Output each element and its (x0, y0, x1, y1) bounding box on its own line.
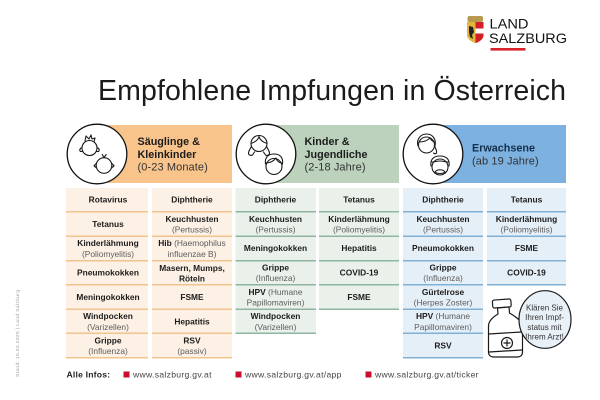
column 2: Masern, Mumps, (159, 263, 225, 273)
column 3: Papillomaviren) (247, 298, 305, 308)
column 5: Keuchhusten (416, 214, 470, 224)
column 5: Diphtherie (422, 194, 464, 204)
column 2: RSV (183, 336, 201, 346)
icon: two adults (403, 124, 463, 184)
footer: links (66, 370, 479, 380)
column 3 (236, 188, 316, 334)
column 5: HPV (Humane (416, 311, 470, 321)
heading: (2-18 Jahre) (304, 162, 366, 174)
header band (266, 125, 399, 183)
column 5: RSV (434, 340, 452, 350)
icon: two children (236, 124, 296, 184)
logo wordmark: SALZBURG (489, 30, 567, 46)
column 1: Grippe (94, 336, 122, 346)
logo red bar (490, 48, 526, 51)
column 5: (Herpes Zoster) (414, 298, 473, 308)
column 3: Keuchhusten (249, 214, 302, 224)
column 1: Rotavirus (89, 194, 128, 204)
column 3: Diphtherie (255, 194, 297, 204)
column 3: Windpocken (251, 311, 300, 321)
callout: Klären Sie Ihren Impfstatus: Ihrem Arzt! (525, 332, 564, 342)
heading (138, 136, 208, 174)
column 5: Pneumokokken (412, 243, 474, 253)
column 3: (Pertussis) (255, 224, 296, 234)
column 5: (Influenza) (423, 273, 463, 283)
column 5: Papillomaviren) (414, 322, 472, 332)
column 3: (Influenza) (256, 273, 295, 283)
column 4: Hepatitis (341, 243, 377, 253)
icon: coat of arms (467, 16, 484, 43)
column 2 (152, 188, 232, 358)
column 2: (Pertussis) (172, 224, 212, 234)
logo: Land Salzburg (467, 16, 567, 51)
column 1: Windpocken (83, 311, 133, 321)
panel: Erwachsene (403, 124, 566, 358)
panel: Kinder & Jugendliche (236, 124, 399, 334)
header band (433, 125, 566, 183)
column 6: (Poliomyelitis) (500, 224, 553, 234)
column 5: Grippe (430, 262, 457, 272)
column 2: Keuchhusten (165, 214, 219, 224)
side note: date stamp: Stand: 15.02.2025 | Land Salzburg (15, 290, 21, 377)
column 5: (Pertussis) (423, 224, 463, 234)
label: Alle Infos: (66, 370, 110, 380)
column 6: Kinderlähmung (496, 214, 557, 224)
panel: Säuglinge & Kleinkinder (66, 124, 232, 358)
column 4: FSME (347, 292, 371, 302)
icon: vaccine bottle (488, 299, 522, 357)
column 4 (319, 188, 399, 310)
logo wordmark (489, 16, 567, 46)
column 1: (Poliomyelitis) (82, 249, 134, 259)
logo wordmark: LAND (490, 16, 528, 32)
heading: Jugendliche (304, 149, 368, 161)
column 1: Kinderlähmung (77, 238, 139, 248)
icon: two babies (67, 124, 127, 184)
column 2: influenzae B) (168, 249, 217, 259)
heading: (0-23 Monate) (138, 162, 208, 174)
heading (304, 136, 368, 174)
column 2: Diphtherie (171, 194, 213, 204)
column 3: HPV (Humane (248, 287, 303, 297)
column 1: Pneumokokken (77, 268, 139, 278)
column 5 (403, 188, 483, 358)
callout: Klären Sie Ihren Impfstatus: status mit (527, 323, 562, 332)
column 2: FSME (180, 292, 204, 302)
column 3: Meningokokken (244, 243, 307, 253)
column 1 (66, 188, 148, 358)
heading: Kleinkinder (138, 149, 197, 161)
column 1: Meningokokken (76, 292, 140, 302)
column 4: Tetanus (343, 194, 375, 204)
column 6 (487, 188, 566, 286)
column 4: (Poliomyelitis) (333, 224, 385, 234)
column 1: (Varizellen) (87, 322, 129, 332)
column 2: Röteln (179, 274, 205, 284)
column 2: Hib (Haemophilus (158, 238, 226, 248)
column 4: COVID-19 (340, 268, 379, 278)
column 2: (passiv) (177, 346, 207, 356)
column 2: Hepatitis (174, 316, 210, 326)
callout: Klären Sie Ihren Impfstatus: Ihren Impf- (525, 313, 564, 322)
column 5: Gürtelrose (422, 287, 465, 297)
column 6: Tetanus (511, 194, 543, 204)
callout: Klären Sie Ihren Impfstatus: Klären Sie (526, 304, 564, 312)
column 6: COVID-19 (507, 268, 546, 278)
link 2: www.salzburg.gv.at/app (244, 370, 342, 380)
column 3: Grippe (262, 262, 289, 272)
heading (472, 142, 539, 168)
heading: Kinder & (304, 136, 350, 148)
column 6: FSME (515, 243, 539, 253)
link 1: www.salzburg.gv.at (132, 370, 212, 380)
heading: (ab 19 Jahre) (472, 156, 539, 168)
title: Empfohlene Impfungen in Österreich (98, 75, 566, 107)
column 3: (Varizellen) (255, 322, 297, 332)
column 1: Tetanus (92, 219, 124, 229)
heading: Säuglinge & (138, 136, 200, 148)
link 3: www.salzburg.gv.at/ticker (374, 370, 479, 380)
column 1: (Influenza) (88, 346, 128, 356)
header band (97, 125, 232, 183)
callout: Klären Sie Ihren Impfstatus (519, 291, 571, 348)
heading: Erwachsene (472, 142, 535, 154)
column 4: Kinderlähmung (328, 214, 390, 224)
